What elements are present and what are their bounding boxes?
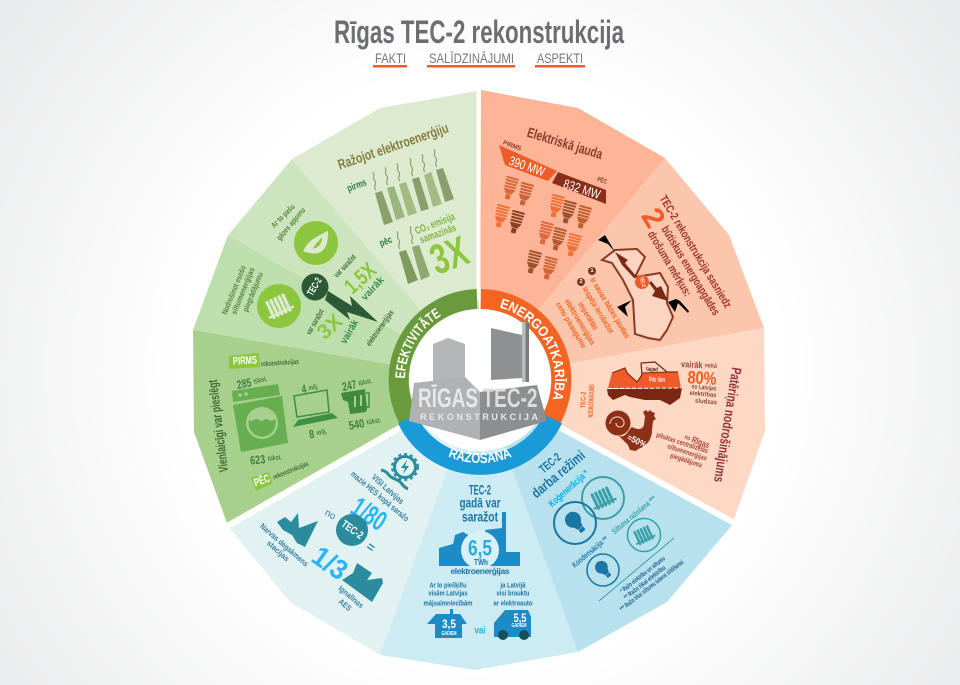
banner: 832 MW: PĒC — [596, 175, 608, 186]
icon: condensing bulb — [587, 554, 619, 586]
text: electric cars: ja Latvijā — [500, 580, 526, 590]
ring: ražošana: RAŽOŠANA — [448, 448, 512, 464]
icon: heat radiator — [628, 518, 660, 552]
tag: pirms: PIRMS — [233, 354, 257, 368]
text: Riga heat — [655, 432, 711, 469]
map with arrows: TEC-2 — [638, 276, 646, 288]
heading: darba režīmi — [528, 447, 588, 501]
label: koģenerācija: Koģenerācija * — [545, 467, 591, 510]
text: electric cars: ar elektroauto — [494, 598, 533, 608]
text: piegrādājumu — [241, 271, 265, 313]
text: Riga heat: no Rīgas — [683, 432, 711, 450]
banner: 390 MW: 390 MW — [507, 153, 547, 179]
numbered list: cenu pieaugumu — [554, 300, 588, 350]
icon: hydro gear — [381, 454, 418, 489]
heading: TEC-2 — [469, 482, 491, 498]
icon: Ignalina — [342, 563, 383, 602]
numbered list — [554, 267, 632, 350]
text: households: visām Latvijas — [428, 588, 468, 598]
figure: 1/80: 1/80 — [345, 491, 393, 537]
label: no: no — [322, 507, 338, 523]
heading: drošuma mērķus: — [645, 229, 693, 299]
panel: energoapgādes drošuma mērķi — [480, 158, 764, 380]
heading: TEC-2 rekonstrukcija sasniedz — [657, 194, 733, 311]
banner: 832 MW — [552, 172, 608, 204]
text — [269, 202, 307, 242]
text: households: mājsaimniecībām — [424, 598, 473, 608]
text: Nodrošinot esošo — [220, 264, 248, 316]
number 2: 2 — [635, 202, 671, 234]
values: washing machine — [235, 372, 283, 468]
text: 3X more: var saražot — [304, 307, 326, 336]
tag: pirms: rekonstrukcijas — [261, 359, 299, 368]
3X figure: 3X — [424, 227, 474, 283]
logo text: TEC-2 — [482, 383, 538, 413]
text: Narva: stacijas — [265, 539, 291, 564]
text: Ignalina: Ignalīnas — [337, 584, 366, 610]
map of Latvia: līdz šim — [649, 376, 665, 384]
text: 3X more: elektroenerģijas — [364, 308, 396, 348]
panel: ar to pašu gāzes apjomu — [228, 159, 480, 380]
chimneys after — [396, 226, 430, 284]
navigation tabs: FAKTI — [375, 50, 406, 66]
text: 3X more — [304, 307, 396, 348]
heading: saražot — [462, 510, 498, 524]
icon: car: GADIEM — [512, 623, 526, 629]
panel: nodrošinot esošo siltumenerģijas piegrādājumu — [193, 235, 480, 380]
numbered list: 1 — [590, 268, 594, 274]
values: laptop: 4 milj. — [300, 380, 320, 396]
panel: comparison with other plants — [228, 380, 480, 655]
text: 80%: 80% — [687, 367, 717, 389]
icon: house — [427, 609, 467, 638]
text: 80%: elektrības — [689, 390, 717, 399]
ring: efektivitāte — [388, 289, 478, 423]
heading: Ražojot elektroenerģiju — [336, 120, 450, 172]
icon: plant with 6,5 TWh: TWh — [474, 557, 488, 567]
text: 1,5X more: 1,5X — [339, 257, 381, 299]
text: households: Ar to piešķiltu — [430, 580, 467, 590]
text: TEC-2 nodrošinājums: NODROŠINĀJUMS — [586, 384, 596, 418]
values: laptop: 8 milj. — [308, 425, 328, 441]
badge: TEC-2: TEC-2 — [339, 518, 365, 542]
text: Ar to pašu — [269, 202, 297, 230]
footnotes — [619, 555, 685, 613]
label: kondensācija: Kondensācija ** — [570, 534, 610, 570]
banner: 390 MW — [499, 139, 557, 181]
logo text — [418, 383, 538, 422]
text: Riga heat: siltumenerģijas — [666, 442, 708, 463]
banner: 832 MW: 832 MW — [562, 176, 603, 202]
CO2 text: samazinās — [418, 222, 458, 246]
icons: bulbs — [492, 176, 592, 281]
text: hydro plants — [349, 469, 411, 523]
ring: energoatkarība: ENERGOATKARĪBA — [500, 298, 567, 400]
chimneys before — [372, 149, 454, 225]
label: siltuma ražošana: Siltuma ražošana *** — [610, 493, 658, 536]
equals: = — [364, 539, 379, 556]
panel: TEC-2 gadā var saražot — [380, 380, 578, 670]
icon: Narva stations — [277, 513, 318, 547]
text: 80% — [681, 359, 718, 406]
text: 1,5X more: var saražot — [332, 253, 358, 279]
icon: plant with 6,5 TWh: 6,5 — [468, 536, 492, 560]
heading: būtiskus energoapgādes — [659, 224, 721, 318]
ring: ražošana — [398, 415, 562, 475]
navigation tabs: ASPEKTI — [537, 50, 583, 66]
text: 1,5X more: vairāk — [359, 275, 387, 303]
heading: Elektriskā jauda — [525, 124, 605, 162]
label: vai: vai — [474, 626, 486, 636]
text — [220, 264, 265, 316]
tag: pirms — [229, 353, 299, 369]
map with arrows — [598, 235, 689, 340]
icon: rooster: ≈50% — [626, 432, 648, 450]
values: kettle — [341, 374, 383, 433]
panel: TEC-2 darba režīmi — [480, 380, 733, 652]
text: Riga heat: piegādājuma — [669, 453, 703, 469]
numbered list: elektroenerģijas — [563, 297, 597, 347]
heading — [528, 447, 588, 501]
icon: laptop — [293, 390, 338, 427]
text: 80%: vairāk nekā — [681, 359, 718, 371]
CO2 text — [413, 211, 458, 246]
values: kettle: 540 tūkst. — [348, 413, 383, 433]
heading — [460, 482, 501, 524]
map of Latvia — [607, 362, 682, 405]
label: pirms: pirms — [346, 177, 369, 195]
text: TEC-2 nodrošinājums: TEC-2 — [580, 391, 588, 409]
icon: plant with 6,5 TWh: elektroenerģijas — [450, 566, 510, 576]
tag: pēc: rekonstrukcijas — [272, 461, 310, 481]
footnotes: ** Ražo tikai elektrību — [623, 565, 667, 601]
label: pēc: pēc — [378, 234, 394, 249]
navigation tabs: SALĪDZINĀJUMI — [429, 50, 514, 66]
values: laptop — [300, 380, 328, 441]
text: Riga heat: pilsētas centralizētās — [655, 432, 709, 455]
banner: 390 MW: PIRMS — [502, 139, 523, 153]
icon: kettle — [341, 389, 369, 414]
icon: car: 5,5 — [514, 611, 527, 625]
values: kettle: 247 tūkst. — [341, 374, 373, 394]
footnotes: * Ražo elektrību un siltumu — [619, 555, 667, 595]
values: washing machine: 285 tūkst. — [235, 372, 269, 392]
icon: washing machine — [232, 384, 288, 452]
heading: Vienlaicīgi var pieslēgt — [205, 378, 231, 473]
text: hydro plants: VISI Latvijas — [370, 472, 406, 506]
tag: pēc: PĒC — [252, 473, 272, 489]
figure: 1/3: 1/3 — [306, 540, 354, 586]
heading: TEC-2 — [536, 450, 564, 476]
numbered list: Ir savas bāzes jaudas — [588, 276, 632, 340]
icon: radiator — [257, 284, 301, 328]
text: 3X more: 3X — [313, 310, 347, 344]
map of Latvia: tagad — [646, 367, 658, 373]
text: hydro plants: mazie HES kopā saražo — [349, 469, 411, 523]
panel: elektriskā jauda — [480, 90, 665, 380]
icon: car — [494, 610, 531, 640]
heading — [645, 194, 733, 318]
numbered list: importētās — [576, 300, 600, 332]
icon: cogeneration bulb — [554, 502, 596, 544]
icon: leaf — [294, 221, 338, 265]
tag: pēc — [251, 461, 310, 491]
footnotes: *** Ražo tikai siltumu ūdens sildīšanai — [619, 559, 685, 613]
heading: gadā var — [460, 496, 501, 510]
text: 80%: sludzas — [695, 398, 718, 406]
text: siltumenerģijas — [229, 266, 257, 316]
icon: TEC-2 bolt — [302, 274, 378, 322]
ring: efektivitāte: EFEKTIVITĀTE — [395, 308, 441, 378]
text: Narva: Narvas degakmens — [258, 522, 310, 569]
icon: plant with 6,5 TWh — [439, 512, 520, 576]
text: electric cars: visi brauktu — [496, 588, 530, 598]
CO2 text: CO₂ emisija — [413, 211, 457, 237]
ring: energoatkarība — [480, 289, 572, 423]
text: 3X more: vairāk — [339, 318, 361, 346]
icon: cogeneration radiator — [582, 477, 624, 519]
logo text: RĪGAS — [418, 383, 478, 413]
panel: ražojot elektroenerģiju — [292, 91, 480, 380]
icon: rooster — [606, 410, 656, 451]
panel: patēriņa nodrošinājums — [480, 328, 765, 522]
text: households — [424, 580, 473, 608]
text: gāzes apjomu — [275, 206, 307, 242]
text: electric cars — [494, 580, 533, 608]
title: Rīgas TEC-2 rekonstrukcija — [334, 14, 624, 50]
values: washing machine: 623 tūkst. — [249, 450, 283, 468]
panel: vienlaicīgi var pieslēgt — [193, 330, 480, 523]
text: TEC-2 nodrošinājums — [580, 384, 596, 418]
central building logo — [409, 322, 547, 440]
text: Ignalina: AES — [337, 597, 354, 613]
icon: house: GADIEM — [442, 631, 456, 637]
text: 80%: no Latvijas — [691, 383, 717, 393]
numbered list: iespēja ierobežot — [580, 285, 616, 335]
icon: TEC-2 bolt: TEC-2 — [305, 276, 325, 298]
heading: Patēriņa nodrošinājums — [711, 366, 745, 484]
numbered list: 2 — [579, 279, 583, 285]
logo text: REKONSTRUKCIJA — [420, 412, 538, 422]
navigation tabs — [373, 50, 585, 68]
icon: house: 3,5 — [442, 617, 456, 631]
